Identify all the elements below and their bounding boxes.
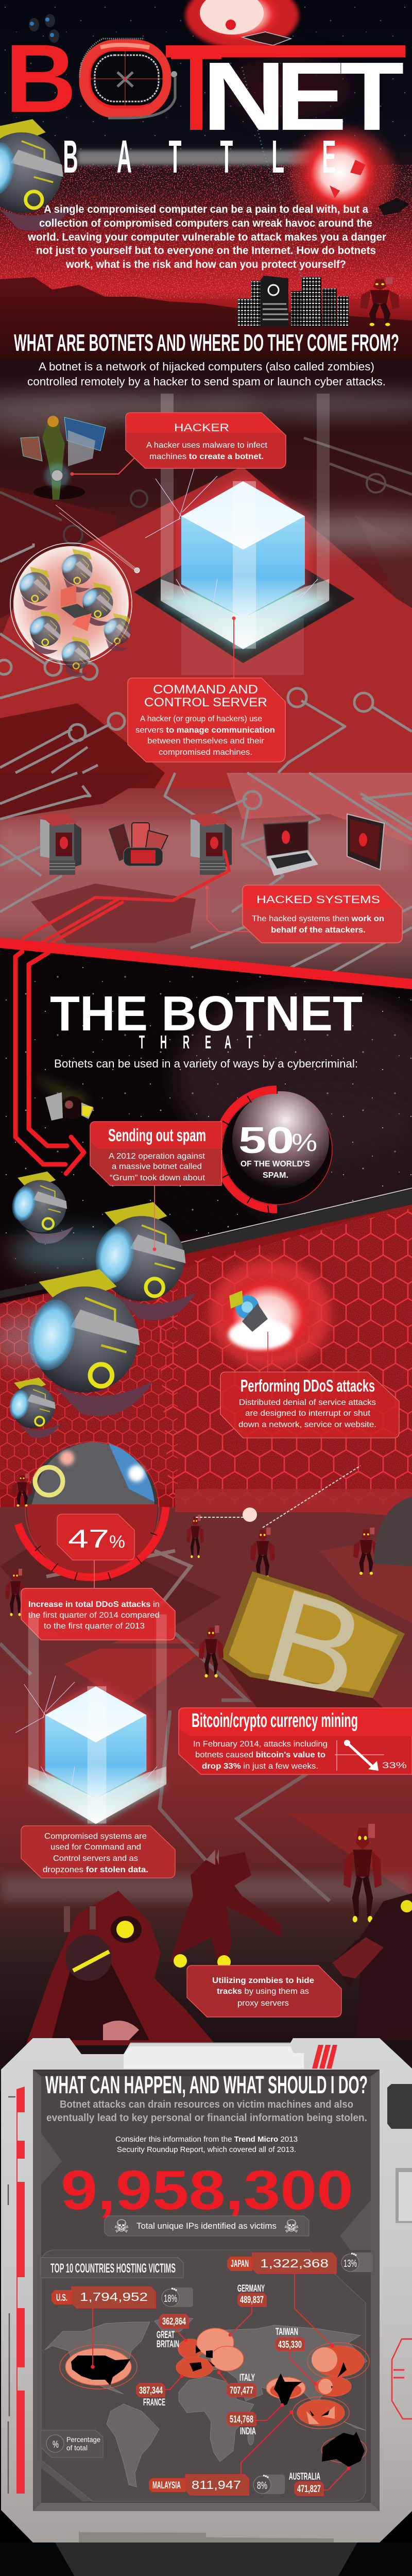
callout: performing DDoS attacks: are designed to interrupt or shut bbox=[245, 1409, 371, 1418]
country: Japan bbox=[227, 2252, 373, 2274]
illustration: hacker at holographic screens bbox=[21, 416, 137, 572]
illustration: attacking sphere one bbox=[9, 1172, 74, 1244]
callout: compromised systems bbox=[21, 1826, 175, 1878]
callout: bitcoin mining: In February 2014, attacks including bbox=[193, 1740, 328, 1749]
country: Taiwan: TAIWAN bbox=[276, 2327, 298, 2337]
stat: 47 percent sphere bbox=[18, 1442, 166, 1581]
callout: utilizing zombies: tracks by using them as bbox=[217, 1987, 309, 1996]
subtitle: BATTLE: BATTLE bbox=[63, 131, 336, 182]
data route from hacked systems bbox=[22, 850, 229, 943]
callout: hacker bbox=[126, 413, 286, 468]
illustration: bitcoin block: B bbox=[249, 1558, 380, 1732]
callout: hacked systems: behalf of the attackers. bbox=[271, 926, 366, 935]
callout: sending out spam: A 2012 operation against bbox=[109, 1152, 205, 1161]
callout: hacked systems: HACKED SYSTEMS bbox=[256, 894, 380, 906]
callout: command and control server: COMMAND AND bbox=[153, 683, 258, 697]
label: top 10 countries: TOP 10 COUNTRIES HOSTING VICTIMS bbox=[50, 2261, 176, 2276]
callout: hacker: HACKER bbox=[174, 422, 229, 434]
illustration: explosion on the right bbox=[291, 129, 394, 222]
heading: the botnet threat: THE BOTNET bbox=[50, 986, 363, 1041]
callout: command and control server: A hacker (or group of hackers) use bbox=[140, 715, 262, 723]
legend: percentage of total bbox=[41, 2430, 103, 2458]
callout: utilizing zombies: proxy servers bbox=[237, 1999, 289, 2008]
callout: command and control server bbox=[128, 678, 285, 762]
stat: 50 percent planet: 50 bbox=[238, 1120, 294, 1161]
text: hero introduction: A single compromised computer can be a pain to deal with, but a bbox=[44, 204, 368, 215]
illustration: hacked laptop bbox=[264, 822, 318, 876]
callout: sending out spam: a massive botnet called bbox=[112, 1162, 202, 1171]
country: Japan: 13% bbox=[344, 2258, 357, 2269]
illustration: zeppelin at right bbox=[379, 198, 409, 215]
leader: spam bbox=[154, 1185, 155, 1249]
stat: 9,958,300 total victims: 9,958,300 bbox=[61, 2159, 353, 2221]
illustration: zombie computers bubble bbox=[9, 543, 140, 682]
country: Australia: 471,827 bbox=[297, 2484, 321, 2495]
callout: utilizing zombies bbox=[187, 1965, 341, 2017]
callout: sending out spam: Sending out spam bbox=[108, 1126, 206, 1145]
map leader dots bbox=[91, 2333, 350, 2470]
title: BOTNET: N bbox=[202, 42, 286, 151]
map: black country silhouettes bbox=[71, 2345, 365, 2467]
callout: increase in DDoS bbox=[21, 1588, 175, 1640]
illustration: distant robot right bbox=[344, 1824, 382, 1922]
illustration: large robot foreground left bbox=[26, 1891, 216, 2045]
divider stripe bbox=[0, 938, 412, 989]
illustration: attacking sphere four bbox=[7, 1378, 61, 1438]
illustration: hacked tablet bbox=[347, 814, 384, 870]
illustration: top explosion bbox=[185, 0, 299, 49]
hero background: night sky fading to red bbox=[0, 0, 412, 361]
title: BOTNET: E bbox=[276, 42, 347, 151]
callout: command and control server: servers to manage communication bbox=[135, 726, 275, 735]
callout: command and control server: between themselves and their bbox=[147, 737, 265, 745]
illustration: large robot foreground right bbox=[332, 1893, 412, 2040]
text: source of data: Security Roundup Report, which covered all of 2013. bbox=[117, 2145, 296, 2154]
illustration: glowing command and control cube bbox=[134, 394, 355, 675]
bottom black background bbox=[0, 2543, 412, 2576]
country: U.S.: U.S. bbox=[56, 2293, 67, 2303]
illustration: robot beside bitcoin bbox=[199, 1625, 224, 1677]
label: top 10 countries bbox=[41, 2258, 183, 2278]
callout: bitcoin mining: drop 33% in just a few weeks. bbox=[202, 1762, 318, 1771]
country: U.S. bbox=[52, 2287, 193, 2308]
country: Australia bbox=[289, 2471, 323, 2496]
force field hexagon grid bbox=[0, 1208, 412, 1510]
illustration: hacked tower two bbox=[191, 813, 232, 875]
text: hero introduction: not just to yourself but to everyone on the Internet. How do botnets bbox=[36, 245, 376, 257]
title: BOTNET bbox=[5, 19, 405, 156]
stat: 50 percent planet: % bbox=[291, 1129, 317, 1157]
icon: skull left: ☠ bbox=[114, 2216, 129, 2237]
country: Malaysia: MALAYSIA bbox=[152, 2480, 181, 2491]
callout: performing DDoS attacks: down a network, service or website. bbox=[238, 1420, 376, 1429]
country: U.S.: 18% bbox=[164, 2293, 177, 2304]
circuit traces bbox=[0, 544, 412, 974]
leader: 47 percent bbox=[94, 1560, 95, 1588]
country: Great Britain: 362,864 bbox=[162, 2316, 186, 2327]
device screen bbox=[33, 2070, 380, 2511]
country: Malaysia: 8% bbox=[257, 2480, 267, 2492]
dot: spam leader bbox=[152, 1248, 157, 1251]
country: France: FRANCE bbox=[143, 2397, 165, 2408]
lower ground background bbox=[0, 1643, 412, 2091]
callout: command and control server: CONTROL SERVER bbox=[144, 696, 267, 709]
illustration: giant robot bbox=[360, 277, 400, 326]
callout: performing DDoS attacks bbox=[220, 1372, 399, 1438]
icon: targeting visor inside the O bbox=[80, 39, 177, 118]
heading: the botnet threat bbox=[50, 986, 363, 1070]
country: Italy: 707,477 bbox=[230, 2385, 253, 2396]
chart: bitcoin value drop bbox=[335, 1740, 407, 1771]
legend: percentage of total: Percentage bbox=[66, 2435, 100, 2444]
country: Italy: ITALY bbox=[239, 2372, 255, 2383]
illustration: spherical ship at left bbox=[0, 119, 73, 231]
callout: hacked systems bbox=[243, 885, 402, 943]
callout: performing DDoS attacks: Distributed denial of service attacks bbox=[239, 1398, 376, 1407]
country: India bbox=[227, 2412, 256, 2437]
callout: compromised systems: used for Command and bbox=[50, 1843, 141, 1852]
callout: increase in DDoS: Increase in total DDoS attacks in bbox=[28, 1600, 160, 1609]
stat: 47 percent sphere: % bbox=[109, 1532, 125, 1552]
device bezel bbox=[1, 2038, 412, 2543]
illustration: shooting robot three bbox=[353, 1528, 379, 1575]
illustration: attacking sphere three bbox=[0, 1269, 153, 1416]
title: BOTNET: T bbox=[340, 42, 404, 150]
callout: sending out spam bbox=[90, 1122, 221, 1185]
text: botnet definition: controlled remotely by a hacker to send spam or launch cyber attacks. bbox=[27, 375, 386, 388]
callout: command and control server: compromised machines. bbox=[159, 748, 252, 757]
country: Germany bbox=[237, 2283, 266, 2307]
illustration: hacked phones bbox=[109, 823, 168, 866]
country: U.S.: 1,794,952 bbox=[80, 2290, 148, 2303]
country: Great Britain bbox=[157, 2314, 188, 2350]
illustration: wall explosion bbox=[210, 1260, 331, 1368]
country: Great Britain: BRITAIN bbox=[157, 2339, 179, 2350]
illustration: shooting robot one bbox=[186, 1515, 204, 1558]
device side details bbox=[8, 2084, 412, 2494]
text: botnet impact: Botnet attacks can drain resources on victim machines and also bbox=[60, 2099, 353, 2110]
red pipes with arrow bbox=[15, 952, 84, 1174]
text: hero introduction: collection of compromised computers can wreak havoc around the bbox=[39, 217, 372, 229]
text: source of data: Consider this information from the Trend Micro 2013 bbox=[115, 2135, 298, 2144]
illustration: hacked tower one bbox=[40, 813, 81, 875]
illustration: second glowing cube bbox=[15, 1615, 167, 1824]
legend: percentage of total: % bbox=[53, 2439, 59, 2450]
circuit board background bbox=[0, 358, 412, 992]
illustration: dome turret bbox=[373, 1497, 412, 1566]
country: Germany: 489,837 bbox=[240, 2295, 264, 2306]
heading: the botnet threat: THREAT bbox=[139, 1032, 252, 1053]
country: Malaysia: 811,947 bbox=[192, 2478, 241, 2492]
ddos wall section background bbox=[0, 1188, 412, 1510]
stat: 50 percent planet: OF THE WORLD'S bbox=[241, 1160, 310, 1168]
dot: command server leader bbox=[232, 616, 236, 620]
illustration: laser beams and impact bbox=[196, 1466, 360, 1528]
threat section: starry background bbox=[0, 947, 412, 1236]
illustration: attacking sphere two bbox=[10, 1202, 196, 1320]
ground panels and traces bbox=[0, 1633, 412, 1901]
callout: sending out spam: “Grum” took down about bbox=[110, 1174, 205, 1182]
callout: utilizing zombies: Utilizing zombies to hide bbox=[212, 1976, 314, 1985]
callout: bitcoin mining bbox=[179, 1708, 412, 1774]
country: Japan: JAPAN bbox=[231, 2259, 249, 2269]
stat: 47 percent sphere: 47 bbox=[68, 1524, 109, 1553]
country: India: 514,768 bbox=[230, 2414, 253, 2425]
text: botnet definition bbox=[27, 360, 386, 388]
callout: compromised systems: dropzones for stolen data. bbox=[43, 1866, 148, 1874]
leader: ddos bbox=[267, 1332, 268, 1372]
label: total unique IPs: Total unique IPs identified as victims bbox=[136, 2221, 277, 2231]
callout: compromised systems: Control servers and as bbox=[53, 1854, 138, 1863]
title: BOTNET: T bbox=[170, 19, 222, 156]
text: source of data bbox=[115, 2135, 298, 2154]
country: Germany: GERMANY bbox=[237, 2283, 265, 2294]
dot: hacker leader bbox=[70, 472, 74, 476]
callout: increase in DDoS: to the first quarter of 2013 bbox=[44, 1622, 145, 1631]
country: Malaysia bbox=[149, 2475, 285, 2495]
country: Great Britain: GREAT bbox=[157, 2330, 175, 2341]
callout: increase in DDoS: the first quarter of 2014 compared bbox=[28, 1611, 160, 1620]
text: hero introduction: work, what is the risk and how can you protect yourself? bbox=[65, 259, 346, 270]
text: hero introduction bbox=[27, 204, 386, 270]
leader: hacked systems bbox=[207, 888, 250, 931]
world map bbox=[45, 2316, 367, 2487]
text: botnet definition: A botnet is a network of hijacked computers (also called zombies) bbox=[39, 360, 374, 373]
title: BOTNET: O bbox=[76, 23, 165, 133]
country: Australia: AUSTRALIA bbox=[289, 2471, 320, 2482]
illustration: mountain silhouette bbox=[0, 277, 412, 361]
label: total unique IPs bbox=[105, 2216, 309, 2237]
stat: 50 percent planet bbox=[214, 1086, 332, 1214]
floor bbox=[0, 1489, 412, 1662]
illustration: middle robot bbox=[170, 1849, 281, 1969]
dot: hacked systems leader bbox=[205, 886, 209, 889]
country: Italy bbox=[227, 2372, 256, 2397]
callout: hacked systems: The hacked systems then work on bbox=[252, 914, 384, 923]
country: Taiwan: 435,330 bbox=[278, 2340, 302, 2350]
stat: 50 percent planet: SPAM. bbox=[263, 1171, 288, 1180]
illustration: shooting robot two bbox=[250, 1528, 275, 1579]
country: France: 387,344 bbox=[139, 2385, 163, 2396]
chart: bitcoin value drop: 33% bbox=[382, 1760, 407, 1770]
map highlights: victim countries bbox=[60, 2328, 369, 2463]
heading: the botnet threat: Botnets can be used in a variety of ways by a cybercriminal: bbox=[54, 1057, 358, 1070]
illustration: distant attack ships bbox=[29, 14, 59, 43]
country: France bbox=[136, 2383, 165, 2408]
callout leader: hacker bbox=[72, 457, 135, 474]
illustration: small flying sphere bbox=[31, 1074, 94, 1121]
icon: skull right: ☠ bbox=[284, 2216, 299, 2237]
illustration: city skyline bbox=[238, 276, 349, 326]
text: botnet impact bbox=[46, 2099, 367, 2124]
callout: bitcoin mining: botnets caused bitcoin's value to bbox=[195, 1751, 325, 1759]
legend: percentage of total: of total bbox=[66, 2444, 88, 2452]
callout: hacker: machines to create a botnet. bbox=[149, 452, 264, 461]
country: India: INDIA bbox=[240, 2426, 256, 2437]
text: hero introduction: world. Leaving your computer vulnerable to attack makes you a danger bbox=[27, 231, 386, 243]
map panel bbox=[41, 2250, 366, 2501]
callout: compromised systems: Compromised systems are bbox=[44, 1832, 147, 1841]
device stand bbox=[55, 2543, 357, 2576]
illustration: robot bottom left bbox=[5, 1569, 26, 1616]
callout: hacker: A hacker uses malware to infect bbox=[146, 441, 268, 450]
text: botnet impact: eventually lead to key personal or financial information being stolen. bbox=[46, 2112, 367, 2124]
country: Japan: 1,322,368 bbox=[260, 2257, 329, 2270]
leader: command server bbox=[233, 618, 234, 678]
title: BOTNET: B bbox=[5, 25, 76, 133]
illustration: robot left of sphere bbox=[12, 1473, 32, 1506]
country: Taiwan bbox=[276, 2327, 304, 2351]
map leader lines bbox=[93, 2274, 349, 2490]
